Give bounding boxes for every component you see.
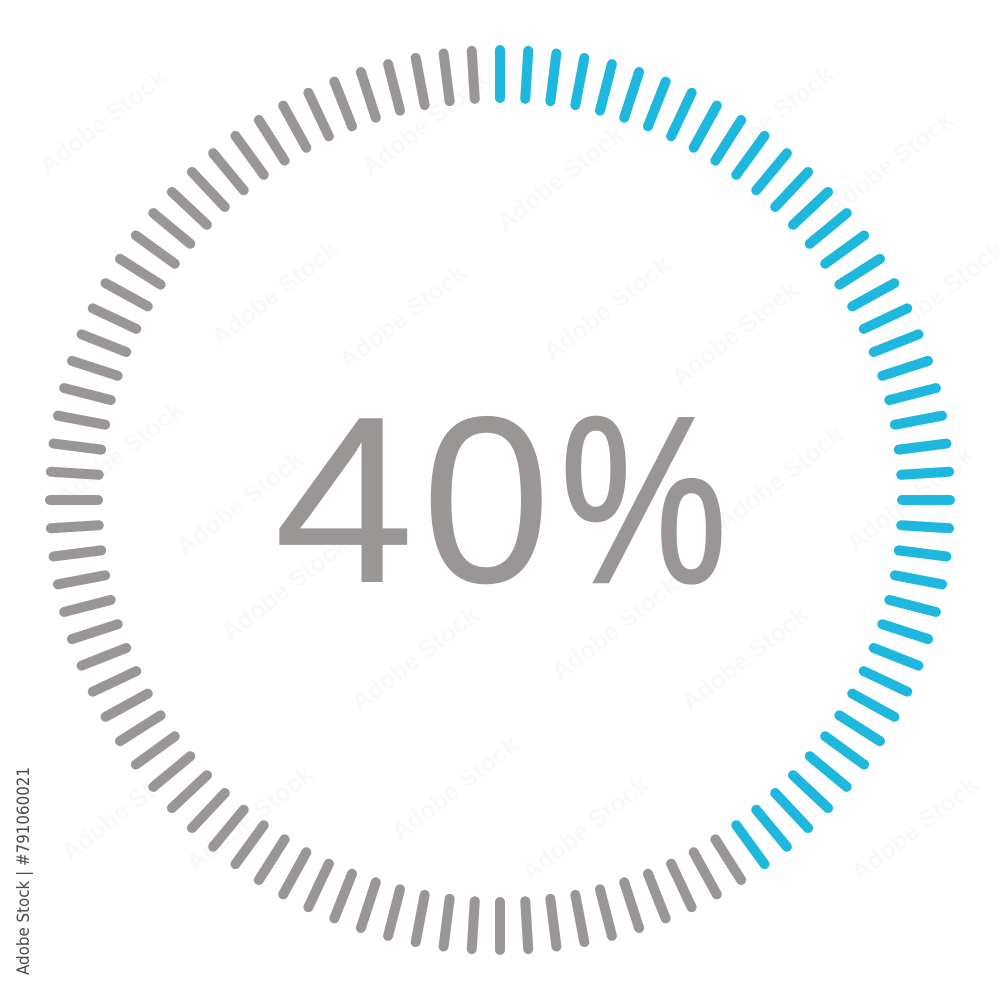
text: Adobe Stock bbox=[666, 276, 804, 392]
text: Adobe Stock bbox=[491, 121, 629, 237]
percentage label: 0 bbox=[422, 366, 551, 633]
text: Adobe Stock bbox=[334, 259, 472, 375]
text: Adobe Stock bbox=[356, 66, 494, 182]
percentage label: 4 bbox=[274, 367, 415, 633]
text: Adobe Stock bbox=[516, 771, 654, 887]
text: Adobe Stock bbox=[701, 61, 839, 177]
text: Adobe Stock bbox=[34, 64, 172, 180]
text: Adobe Stock bbox=[51, 396, 189, 512]
text: Adobe Stock bbox=[821, 106, 959, 222]
text: Adobe Stock bbox=[546, 571, 684, 687]
text: Adobe Stock bbox=[56, 751, 194, 867]
text: Adobe Stock bbox=[216, 531, 354, 647]
progress ring: blue completed ticks (40%) bbox=[500, 50, 950, 864]
text: Adobe Stock bbox=[181, 761, 319, 877]
text: Adobe Stock bbox=[346, 601, 484, 717]
text: Adobe Stock bbox=[538, 251, 676, 367]
text: Adobe Stock bbox=[841, 441, 979, 557]
progress ring: grey remaining ticks bbox=[50, 51, 741, 950]
percentage label bbox=[274, 366, 727, 633]
text: Adobe Stock bbox=[846, 771, 984, 887]
text: Adobe Stock bbox=[206, 236, 344, 352]
text: Adobe Stock bbox=[711, 421, 849, 537]
text: Adobe Stock bbox=[386, 731, 524, 847]
stock credit vertical text: Adobe Stock | #791060021 bbox=[14, 767, 34, 975]
text: Adobe Stock bbox=[676, 601, 814, 717]
percentage label: % bbox=[560, 368, 727, 633]
text: Adobe Stock bbox=[171, 446, 309, 562]
